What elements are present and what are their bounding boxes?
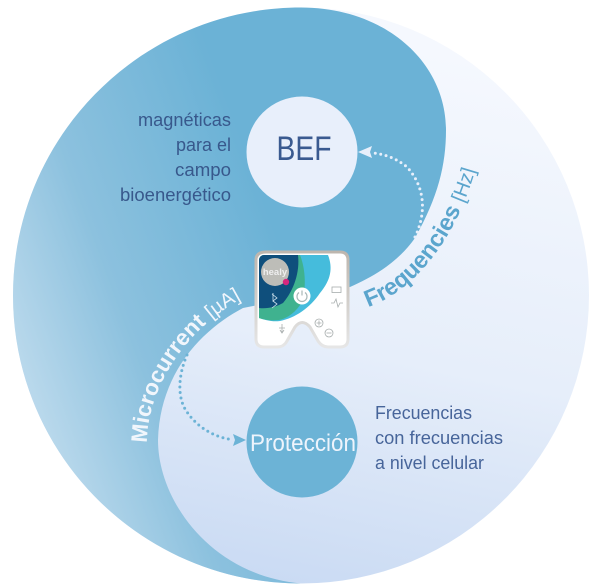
icon: plus [315,319,323,327]
label: Microcurrent [µA]: Microcurrent [µA] [131,287,242,442]
text: BEF description [120,110,231,205]
icon: bluetooth [272,293,277,308]
icon: Healy device [256,252,348,347]
icon: power button [294,288,310,304]
text: BEF description: para el [176,135,231,155]
arrow: dotted microcurrent to Protección [180,355,246,446]
healy logo disc: healy [263,267,288,278]
circle: Protección [246,386,358,498]
icon: pulse [331,299,343,307]
label: Frequencies [Hz]: Frequencies [Hz] [363,167,479,307]
text: Protección description: a nivel celular [375,453,484,473]
text: BEF description: bioenergético [120,185,231,205]
arrow: dotted frequencies to BEF [358,146,422,237]
circle: Protección: Protección [250,430,356,457]
dark swirl half [13,8,446,584]
icon: battery [332,287,341,292]
text: BEF description: campo [175,160,231,180]
text: Protección description: con frecuencias [375,428,503,448]
text: BEF description: magnéticas [138,110,231,130]
text: Protección description [375,403,503,473]
icon: usb [279,324,285,333]
device screen art [259,255,331,321]
text: Protección description: Frecuencias [375,403,472,423]
circle: BEF: BEF [276,130,332,168]
device body [256,252,348,347]
circle: BEF [246,96,358,208]
icon: minus [325,329,333,337]
